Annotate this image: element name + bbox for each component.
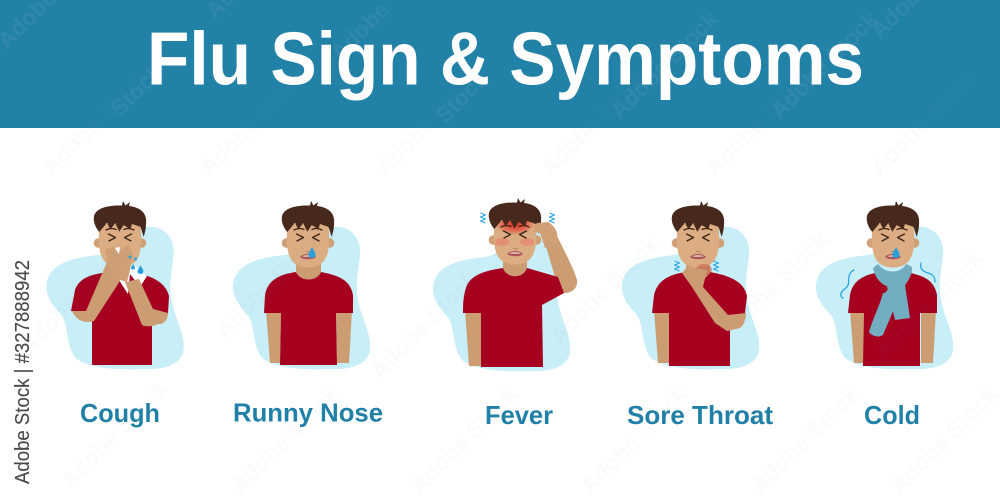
watermarks on body: Adobe Stock — [865, 63, 983, 181]
left arm: fever — [465, 310, 481, 366]
background blob: fever — [433, 229, 570, 371]
watermarks on body: Adobe Stock — [37, 63, 155, 181]
right arm: fever — [545, 236, 577, 293]
sneeze drops: cough — [128, 256, 143, 274]
shirt: fever — [463, 268, 564, 367]
watermarks on header — [0, 0, 934, 129]
arms: runny nose — [266, 310, 352, 363]
figure: cold — [816, 201, 953, 369]
watermarks on header: Stock — [430, 66, 493, 129]
figure: fever — [433, 198, 577, 371]
shirt: cough — [71, 272, 169, 365]
watermarks on header: Stock — [105, 59, 168, 122]
figure: runny nose — [233, 201, 370, 369]
right arm: cough — [125, 279, 168, 326]
watermarks on body: Adobe Stock — [885, 381, 1000, 499]
figure: sore throat — [622, 201, 759, 369]
watermarks on body: Adobe Stock — [700, 63, 818, 181]
header band — [0, 0, 1000, 128]
arms: cold — [850, 310, 936, 363]
watermarks on header: Adobe Stock — [765, 6, 883, 124]
watermarks on body: Adobe Stock — [405, 381, 523, 499]
watermarks on body: Adobe Stock — [370, 63, 488, 181]
tissue: cough — [115, 264, 147, 294]
watermarks on body: Adobe Stock — [545, 231, 663, 349]
figure: cough — [46, 201, 184, 369]
shirt: runny nose — [264, 272, 353, 365]
forearm and hand: sore throat — [682, 267, 746, 331]
hand on forehead: fever — [533, 222, 558, 248]
watermarks on body: Adobe Stock — [365, 266, 483, 384]
label: cold: Cold — [864, 400, 920, 430]
background blob: cold — [816, 227, 953, 369]
watermarks on body: Adobe Stock — [535, 63, 653, 181]
neck redness: sore throat — [696, 264, 712, 276]
nose drop: cold — [892, 247, 900, 258]
watermarks on body: Adobe Stock — [195, 63, 313, 181]
background blob: sore throat — [622, 227, 759, 369]
shiver marks: fever — [480, 213, 554, 223]
head: fever — [489, 198, 541, 264]
neck: runny nose — [296, 258, 321, 280]
label: sore throat: Sore Throat — [627, 400, 773, 430]
watermarks on body: Adobe Stock — [870, 246, 988, 364]
cheeks: fever — [495, 238, 534, 246]
watermarks on body: Adobe Stock — [225, 381, 343, 499]
head: sore throat — [672, 201, 724, 268]
stock credit, vertical: Adobe Stock | #327888942 — [12, 260, 34, 484]
neck: fever — [503, 255, 527, 276]
neck: sore throat — [686, 258, 710, 280]
background blob: runny nose — [233, 227, 370, 369]
watermarks on header: Adobe Stock — [605, 6, 723, 124]
shirt: sore throat — [652, 272, 747, 366]
hands: cough — [105, 245, 133, 282]
watermarks on body: Adobe Stock — [575, 381, 693, 499]
watermarks on body: Adobe Stock — [55, 376, 173, 494]
head: runny nose — [282, 201, 334, 268]
left arm: cough — [72, 262, 125, 322]
label: fever: Fever — [485, 400, 553, 430]
fever redness — [495, 213, 535, 235]
tissue on hand: cough — [115, 247, 120, 254]
watermarks on body: Adobe Stock — [715, 226, 833, 344]
label: cough: Cough — [80, 398, 160, 428]
head: cough — [94, 201, 146, 268]
head: cold — [867, 201, 919, 268]
shiver marks: sore throat — [674, 261, 718, 271]
background blob: cough — [46, 227, 184, 369]
label: runny nose: Runny Nose — [233, 398, 383, 428]
watermarks on body: Adobe Stock — [15, 241, 133, 359]
left arm: sore throat — [654, 310, 669, 363]
nose drop: runny nose — [308, 247, 316, 258]
shirt: cold — [848, 272, 937, 366]
scarf: cold — [869, 264, 912, 336]
watermarks on body: Adobe Stock — [745, 381, 863, 499]
title: Flu Sign & Symptoms — [147, 16, 864, 100]
watermarks on body: Adobe Stock — [210, 226, 328, 344]
shiver lines: cold — [841, 263, 935, 298]
